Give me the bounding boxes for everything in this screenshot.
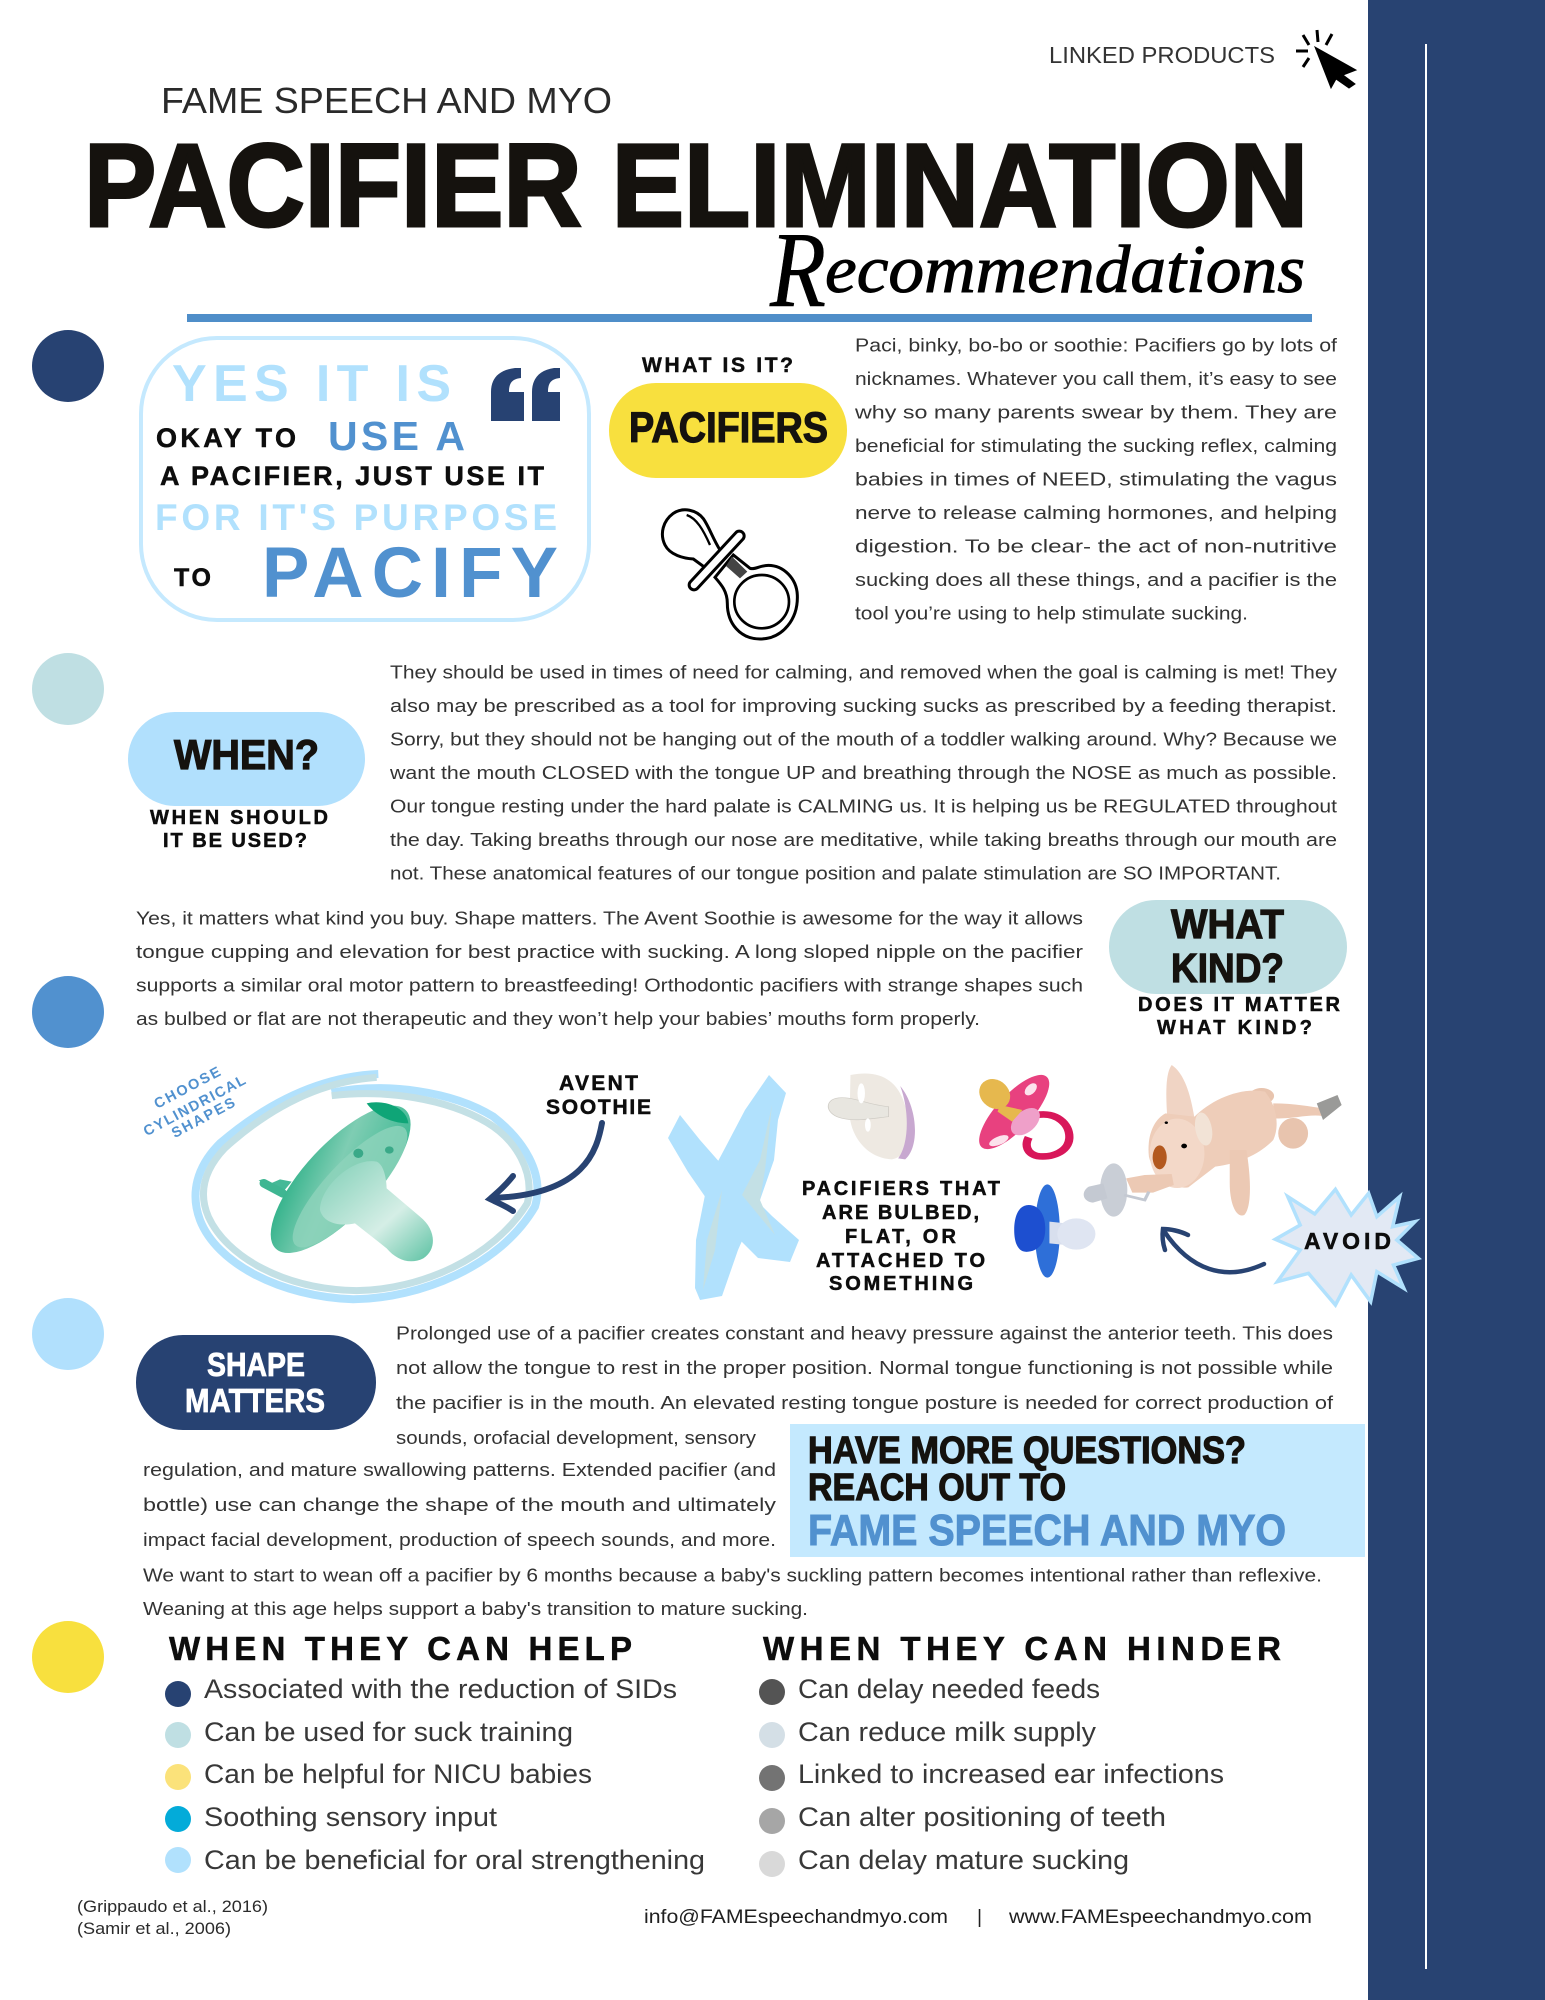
callout: have more questions	[790, 1424, 1365, 1557]
text block: what is it: why so many parents swear by them. They are	[854, 402, 1337, 422]
quote line: use a: USE A	[328, 413, 465, 459]
pill: what kind: WHAT	[1171, 901, 1284, 947]
text block: what is it	[854, 334, 1338, 624]
icon: quote marks	[491, 368, 560, 421]
text block: what is it: nicknames. Whatever you call them, it’s easy to see	[855, 368, 1337, 389]
label: choose cylindrical shapes: CYLINDRICAL	[141, 1072, 250, 1140]
list: when they can hinder: Can delay needed feeds	[798, 1674, 1100, 1704]
contact details	[644, 1906, 1312, 1928]
title: PACIFIER ELIMINATION	[84, 120, 1308, 252]
text block: shape matters: regulation, and mature swallowing patterns. Extended pacifier (and	[143, 1459, 776, 1480]
references	[77, 1897, 268, 1938]
text block: when: also may be prescribed as a tool for improving sucking sucks as prescribed by a feeding therapist.	[390, 695, 1337, 716]
pill: pacifiers: PACIFIERS	[629, 404, 828, 452]
text block: shape matters: impact facial development, production of speech sounds, and more.	[143, 1529, 776, 1550]
pill: pacifiers	[609, 383, 847, 478]
text block: what is it: Paci, binky, bo-bo or soothie: Pacifiers go by lots of	[855, 334, 1338, 356]
arrow: to avoid examples	[1163, 1229, 1264, 1272]
linked products label: LINKED PRODUCTS	[1049, 42, 1275, 68]
right side band	[1368, 0, 1545, 2000]
contact details: info@FAMEspeechandmyo.com	[644, 1906, 948, 1928]
text block: shape matters: Prolonged use of a pacifier creates constant and heavy pressure against the anterior teeth. This does	[396, 1322, 1333, 1344]
label: pacifiers that are bulbed: SOMETHING	[829, 1273, 973, 1295]
callout: have more questions: REACH OUT TO	[808, 1467, 1066, 1509]
label: pacifiers that are bulbed: FLAT, OR	[845, 1226, 957, 1248]
quote line: pacify: PACIFY	[262, 534, 558, 613]
quote line: yes it is: YES IT IS	[172, 355, 451, 413]
quote line: to: TO	[174, 564, 211, 592]
quote line: for its purpose: FOR IT'S PURPOSE	[155, 497, 557, 538]
pill: when: WHEN?	[174, 731, 319, 778]
contact details: www.FAMEspeechandmyo.com	[1008, 1906, 1312, 1928]
text block: when: They should be used in times of need for calming, and removed when the goal is calming is met! They	[390, 662, 1338, 682]
quote line: okay to: OKAY TO	[156, 423, 296, 453]
list: when they can hinder	[759, 1674, 1224, 1877]
script subtitle: ecommendations	[825, 231, 1305, 307]
script subtitle	[769, 211, 1305, 330]
text block: shape matters: sounds, orofacial development, sensory	[396, 1427, 757, 1448]
badge: avoid: AVOID	[1304, 1228, 1391, 1254]
icon: brush x	[668, 1075, 799, 1300]
icon: hand-drawn circle	[195, 1074, 537, 1299]
label: pacifiers that are bulbed	[802, 1178, 1000, 1295]
label: avent soothie: SOOTHIE	[546, 1096, 651, 1119]
pill: shape matters	[136, 1335, 376, 1430]
text block: what is it: babies in times of NEED, stimulating the vagus	[855, 468, 1337, 490]
list: when they can hinder: Can reduce milk supply	[798, 1717, 1097, 1747]
label: does it matter what kind: DOES IT MATTER	[1138, 994, 1341, 1016]
subtitle: organisation name: FAME SPEECH AND MYO	[161, 80, 612, 121]
callout: have more questions: HAVE MORE QUESTIONS?	[808, 1430, 1246, 1472]
icon: avent soothie pacifier	[250, 1085, 433, 1273]
image: white pacifier	[828, 1074, 915, 1159]
list: when they can help: Associated with the reduction of SIDs	[204, 1674, 677, 1704]
text block: shape matters	[143, 1322, 1334, 1619]
image: pink pacifier	[967, 1067, 1069, 1157]
label: does it matter what kind	[1138, 994, 1341, 1039]
pill: when	[128, 712, 365, 806]
text block: what kind	[136, 908, 1083, 1029]
list: when they can hinder: Can alter positioning of teeth	[798, 1802, 1166, 1832]
label: pacifiers that are bulbed: PACIFIERS THAT	[802, 1178, 1000, 1200]
heading: when they can help: WHEN THEY CAN HELP	[169, 1630, 632, 1667]
icon: cursor click	[1296, 30, 1356, 88]
text block: when: the day. Taking breaths through our nose are meditative, while taking breaths through our mouth are	[390, 829, 1337, 850]
pill: shape matters: MATTERS	[185, 1382, 325, 1419]
list: when they can help: Can be used for suck training	[204, 1717, 573, 1747]
panel: quote card	[141, 338, 589, 620]
heading: when they can hinder: WHEN THEY CAN HINDER	[763, 1630, 1281, 1667]
references: (Grippaudo et al., 2016)	[77, 1897, 268, 1916]
label: when should it be used	[150, 807, 328, 852]
text block: what is it: nerve to release calming hormones, and helping	[855, 502, 1337, 523]
label: choose cylindrical shapes: SHAPES	[169, 1094, 240, 1142]
script subtitle: R	[769, 211, 826, 330]
pill: shape matters: SHAPE	[207, 1346, 305, 1383]
text block: shape matters: the pacifier is in the mouth. An elevated resting tongue posture is needed for correct production of	[396, 1392, 1334, 1413]
label: pacifiers that are bulbed: ARE BULBED,	[822, 1202, 979, 1224]
label: choose cylindrical shapes: CHOOSE	[152, 1063, 225, 1113]
list: when they can hinder: Can delay mature sucking	[798, 1845, 1129, 1875]
contact details: |	[977, 1906, 982, 1928]
list: when they can help: Can be helpful for NICU babies	[204, 1759, 592, 1789]
callout: have more questions: FAME SPEECH AND MYO	[808, 1506, 1286, 1555]
text block: what kind: Yes, it matters what kind you buy. Shape matters. The Avent Soothie is awesome for the way it allows	[136, 908, 1083, 928]
label: does it matter what kind: WHAT KIND?	[1157, 1017, 1312, 1039]
references: (Samir et al., 2006)	[77, 1919, 231, 1938]
list: when they can help: Can be beneficial for oral strengthening	[204, 1845, 705, 1875]
pill: what kind	[1109, 900, 1347, 994]
label: avent soothie: AVENT	[559, 1072, 638, 1095]
label: what is it: WHAT IS IT?	[642, 354, 793, 377]
label: avent soothie	[546, 1072, 651, 1119]
list: when they can help: Soothing sensory input	[204, 1802, 498, 1832]
pill: what kind: KIND?	[1171, 945, 1284, 991]
text block: what is it: sucking does all these things, and a pacifier is the	[855, 569, 1337, 590]
label: pacifiers that are bulbed: ATTACHED TO	[816, 1250, 985, 1272]
text block: when: want the mouth CLOSED with the tongue UP and breathing through the NOSE as much as possible.	[389, 762, 1337, 783]
text block: shape matters: not allow the tongue to rest in the proper position. Normal tongue functioning is not possible while	[396, 1357, 1333, 1378]
text block: what is it: beneficial for stimulating the sucking reflex, calming	[855, 435, 1337, 456]
text block: when: Our tongue resting under the hard palate is CALMING us. It is helping us be REGULATED throughout	[390, 796, 1337, 816]
text block: when: Sorry, but they should not be hanging out of the mouth of a toddler walking around. Why? Because we	[390, 728, 1337, 750]
text block: when: not. These anatomical features of our tongue position and palate stimulation are SO IMPORTANT.	[390, 862, 1281, 884]
text block: what kind: as bulbed or flat are not therapeutic and they won’t help your babies’ mouths form properly.	[136, 1008, 980, 1029]
image: plush pig pacifier	[1084, 1065, 1342, 1217]
blue divider	[187, 314, 1312, 322]
quote line: a pacifier: A PACIFIER, JUST USE IT	[160, 461, 544, 491]
text block: what is it: digestion. To be clear- the act of non-nutritive	[855, 536, 1337, 556]
text block: what kind: tongue cupping and elevation for best practice with sucking. A long sloped nipple on the pacifier	[136, 941, 1083, 962]
text block: what is it: tool you’re using to help stimulate sucking.	[855, 602, 1248, 624]
list: when they can help	[165, 1674, 705, 1875]
badge: avoid	[1275, 1189, 1418, 1305]
list: when they can hinder: Linked to increased ear infections	[798, 1759, 1224, 1789]
arrow: to avent soothie	[490, 1123, 602, 1211]
label: when should it be used: WHEN SHOULD	[150, 807, 328, 829]
text block: when	[389, 662, 1338, 884]
text block: what kind: supports a similar oral motor pattern to breastfeeding! Orthodontic pacifiers with strange shapes such	[136, 974, 1083, 996]
text block: shape matters: We want to start to wean off a pacifier by 6 months because a baby's suckling pattern becomes intentional rather than reflexive.	[143, 1564, 1322, 1586]
text block: shape matters: Weaning at this age helps support a baby's transition to mature sucking.	[143, 1598, 808, 1619]
section dots	[32, 330, 104, 1693]
text block: shape matters: bottle) use can change the shape of the mouth and ultimately	[143, 1494, 777, 1515]
label: when should it be used: IT BE USED?	[163, 830, 307, 852]
image: blue pacifier	[1014, 1184, 1095, 1278]
icon: pacifier line drawing	[662, 510, 797, 639]
